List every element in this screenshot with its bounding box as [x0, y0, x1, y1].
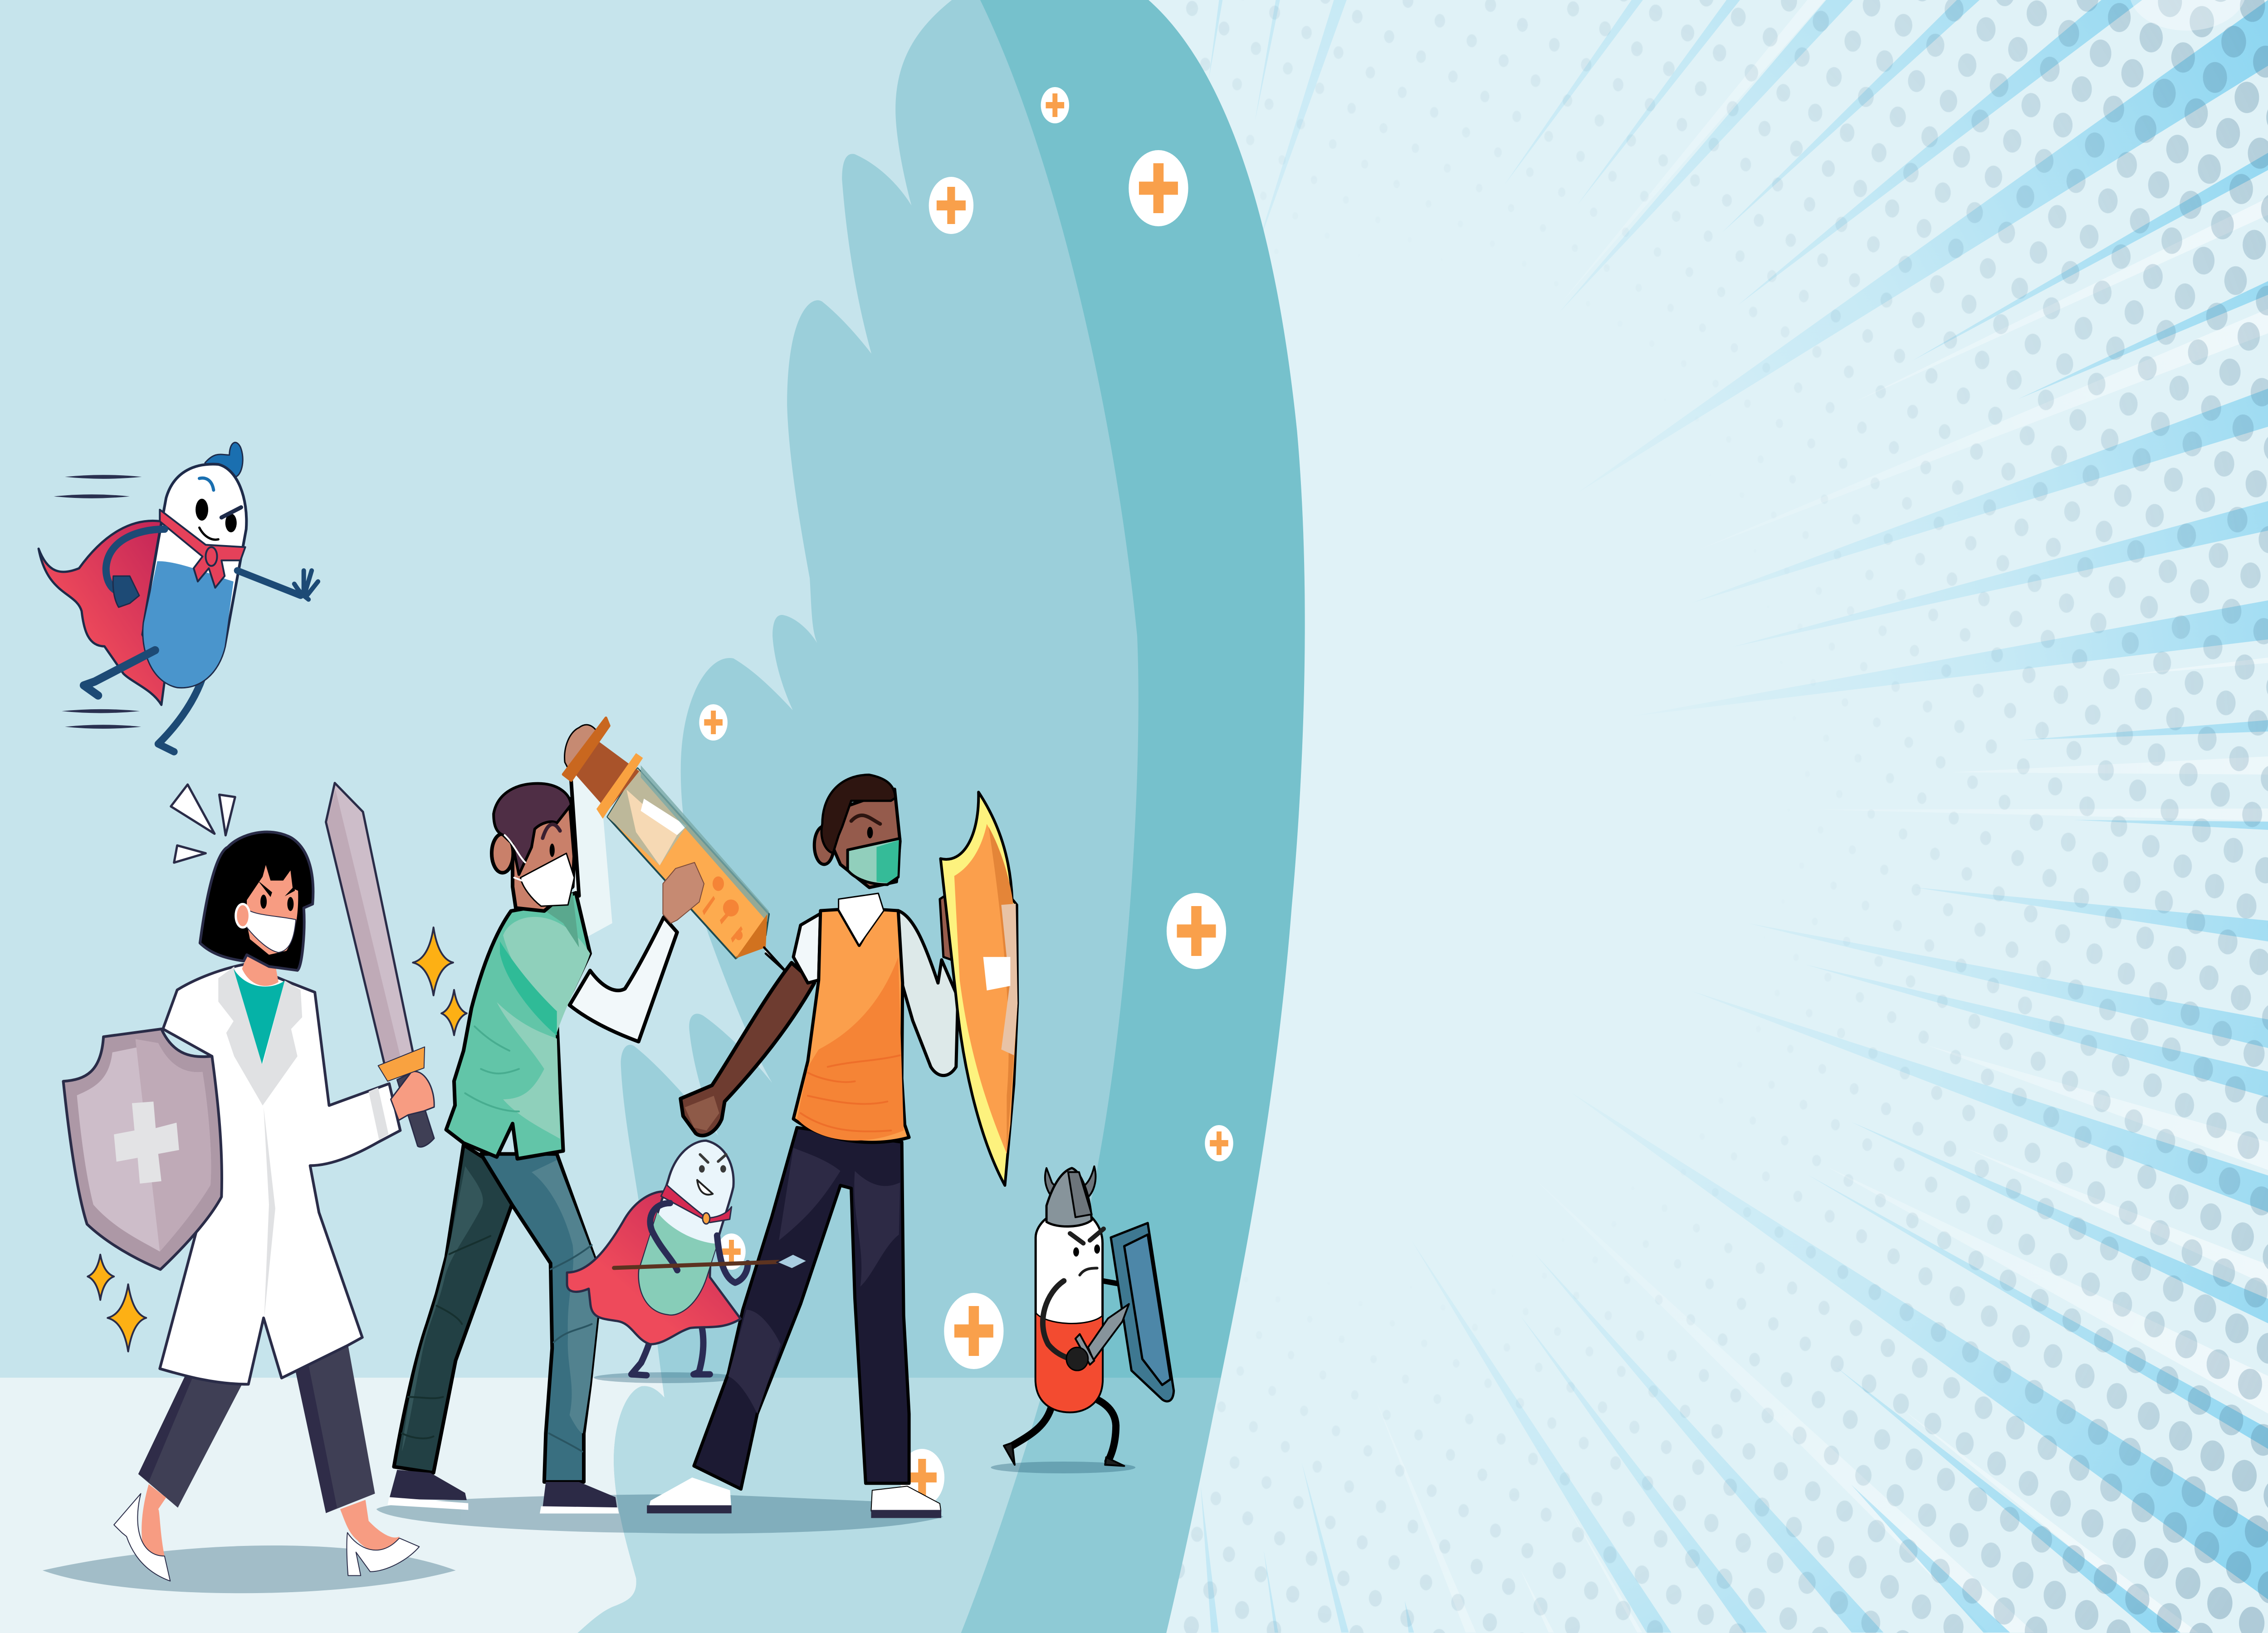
character: flying pill hero	[39, 443, 318, 752]
sword guard	[378, 1047, 425, 1081]
capsule	[143, 464, 246, 687]
blade shade	[327, 789, 400, 1063]
mask shade	[876, 840, 899, 883]
vest folds	[801, 1055, 900, 1131]
white burst rays	[1376, 0, 2268, 1633]
syringe glass shine	[641, 799, 687, 835]
shirt dark collar area	[541, 893, 579, 947]
plus badges	[699, 87, 1233, 1506]
left foot skin	[142, 1484, 166, 1560]
raised hand	[565, 725, 597, 771]
body green half	[639, 1212, 717, 1315]
syringe barrel	[607, 768, 769, 958]
eye and brow	[543, 824, 560, 857]
left trouser leg	[394, 1145, 513, 1473]
teal wave	[961, 0, 1305, 1633]
shield face	[954, 824, 1017, 1154]
left sleeve	[793, 914, 821, 983]
hair	[494, 784, 571, 875]
left wall	[0, 0, 1305, 1633]
hand knuckles	[685, 1096, 719, 1131]
syringe glass peach	[626, 790, 677, 865]
speed lines	[54, 475, 142, 729]
scarf	[160, 510, 245, 588]
character: viking pill	[1004, 1166, 1174, 1466]
sword guard	[1075, 1334, 1094, 1365]
helmet	[1046, 1168, 1092, 1227]
syringe glass	[607, 768, 687, 865]
neck	[242, 947, 279, 986]
shield back plate	[1111, 1223, 1174, 1401]
face	[196, 478, 241, 540]
teal floor	[957, 1378, 1240, 1633]
cape	[39, 521, 165, 705]
fist	[113, 576, 139, 607]
mask strap	[505, 835, 525, 881]
front leg	[84, 650, 155, 696]
far hand	[940, 893, 960, 963]
ground shadows	[43, 1372, 1135, 1593]
plunger flange	[596, 753, 643, 819]
sleeve edge	[568, 780, 579, 897]
shield energy blob	[577, 0, 1240, 1633]
feet	[1004, 1443, 1124, 1466]
right leg highlight	[532, 1160, 598, 1433]
arm with fist	[1043, 1281, 1070, 1359]
plunger rod	[573, 741, 639, 811]
scrub top	[234, 969, 285, 1064]
mask	[245, 908, 296, 952]
trousers	[694, 1127, 909, 1489]
coat crease	[264, 1107, 275, 1318]
ear	[492, 834, 513, 873]
cape	[567, 1189, 741, 1344]
eye and brow	[851, 815, 880, 838]
forward sleeve	[570, 917, 677, 1042]
shield rim	[940, 792, 1017, 1185]
spear tip	[777, 1254, 807, 1269]
scarf knot	[205, 547, 217, 566]
back leg	[158, 678, 202, 752]
capsule blue half	[143, 561, 234, 687]
shirt highlight	[503, 917, 590, 1033]
hair	[200, 832, 313, 970]
pill arm behind	[1103, 1281, 1119, 1284]
surgical mask	[848, 838, 900, 885]
bent arm	[106, 529, 165, 592]
left shoe	[114, 1494, 170, 1581]
right leg folds	[549, 1245, 591, 1452]
shirt wrinkles	[465, 1026, 519, 1111]
shield cross white	[983, 957, 1010, 990]
vest shade	[797, 957, 904, 1141]
character: doctor	[64, 783, 467, 1581]
right trouser leg	[481, 1154, 598, 1482]
blob floor	[578, 1378, 1041, 1633]
body	[639, 1141, 733, 1315]
left leg folds	[402, 1236, 490, 1438]
helmet band	[1068, 1172, 1092, 1217]
hand	[391, 1072, 434, 1120]
arm and hand	[237, 570, 318, 600]
neck and head	[513, 795, 574, 911]
shield	[64, 1029, 222, 1269]
halftone dots	[1134, 0, 2268, 1633]
coat	[160, 964, 400, 1384]
right foot skin	[340, 1500, 399, 1552]
legs	[631, 1289, 710, 1375]
syringe liquid spots	[703, 877, 743, 943]
shirt	[446, 893, 590, 1159]
mask	[520, 853, 574, 906]
raised sleeve	[573, 756, 612, 941]
shield inner plate	[1124, 1234, 1171, 1385]
left leg highlight	[402, 1166, 483, 1452]
legs	[1012, 1394, 1116, 1461]
left trouser leg	[138, 1373, 242, 1508]
shirt band	[500, 941, 557, 1035]
lower hand	[663, 863, 704, 923]
shirt lower highlight	[497, 1002, 560, 1139]
shield cross	[114, 1102, 179, 1184]
syringe top edge	[641, 765, 769, 922]
shoes	[389, 1470, 617, 1507]
hair	[205, 443, 243, 478]
sword	[1088, 1304, 1129, 1360]
blue burst rays	[1201, 0, 2268, 1633]
face	[697, 1155, 726, 1194]
ear	[814, 826, 834, 864]
horns	[1045, 1166, 1095, 1203]
character: man in orange	[647, 775, 1017, 1518]
spear shaft	[614, 1262, 778, 1268]
right leg shade	[296, 1365, 337, 1513]
syringe nozzle	[736, 914, 767, 958]
fist	[1066, 1347, 1088, 1370]
right shoe	[871, 1486, 941, 1511]
brooch	[703, 1213, 710, 1224]
trouser highlights	[728, 1148, 900, 1414]
vest	[793, 910, 909, 1142]
sword blade	[326, 783, 413, 1064]
burst glow top right	[2131, 0, 2244, 31]
arms	[650, 1203, 748, 1283]
shield shade	[989, 827, 1017, 1154]
collar	[661, 1185, 732, 1223]
left sole	[647, 1505, 732, 1513]
shield shade half	[136, 1039, 211, 1252]
plunger handle	[563, 718, 609, 780]
needle	[764, 947, 787, 973]
pill red half	[1036, 1313, 1103, 1412]
sword handle	[397, 1072, 434, 1147]
right sleeve	[898, 911, 958, 1076]
face	[247, 865, 298, 955]
left shoe	[649, 1477, 731, 1507]
character: small pill with spear	[567, 1141, 807, 1375]
right trouser leg	[296, 1345, 375, 1513]
shield cross	[1001, 904, 1017, 1055]
eyes	[258, 881, 295, 911]
face	[1070, 1229, 1104, 1275]
soles	[387, 1497, 619, 1514]
alert marks	[171, 785, 235, 863]
dark arm	[680, 963, 814, 1136]
character: man in green with syringe	[387, 718, 787, 1514]
sparkles	[88, 927, 467, 1351]
hair	[821, 775, 895, 853]
sleeve cuff band	[369, 1087, 389, 1140]
head	[828, 789, 900, 887]
pill body	[1036, 1217, 1103, 1412]
right shoe	[347, 1533, 419, 1575]
left leg shade	[138, 1373, 193, 1482]
collar	[839, 893, 884, 946]
coat lapels	[218, 966, 302, 1106]
floor	[0, 1378, 664, 1633]
right sole	[871, 1510, 941, 1518]
ear with strap	[236, 904, 249, 927]
shield inner	[77, 1043, 211, 1252]
